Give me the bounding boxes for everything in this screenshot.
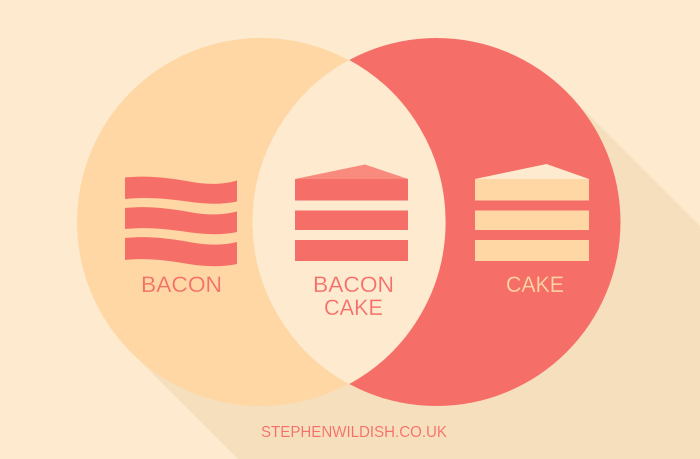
label: bacon cake: CAKE	[324, 295, 383, 320]
label: bacon cake	[313, 272, 394, 320]
icon: cake slice	[475, 164, 589, 261]
label: bacon cake: BACON	[313, 272, 394, 297]
circle: bacon	[77, 38, 445, 406]
icon: bacon strips	[125, 177, 237, 266]
icon: bacon cake slice	[295, 164, 408, 261]
label: bacon: BACON	[141, 272, 222, 297]
footer credit: STEPHENWILDISH.CO.UK	[261, 424, 448, 441]
long drop shadow	[131, 92, 700, 459]
intersection: bacon cake	[253, 60, 445, 384]
circle: cake	[252, 38, 620, 406]
label: cake: CAKE	[506, 272, 564, 297]
